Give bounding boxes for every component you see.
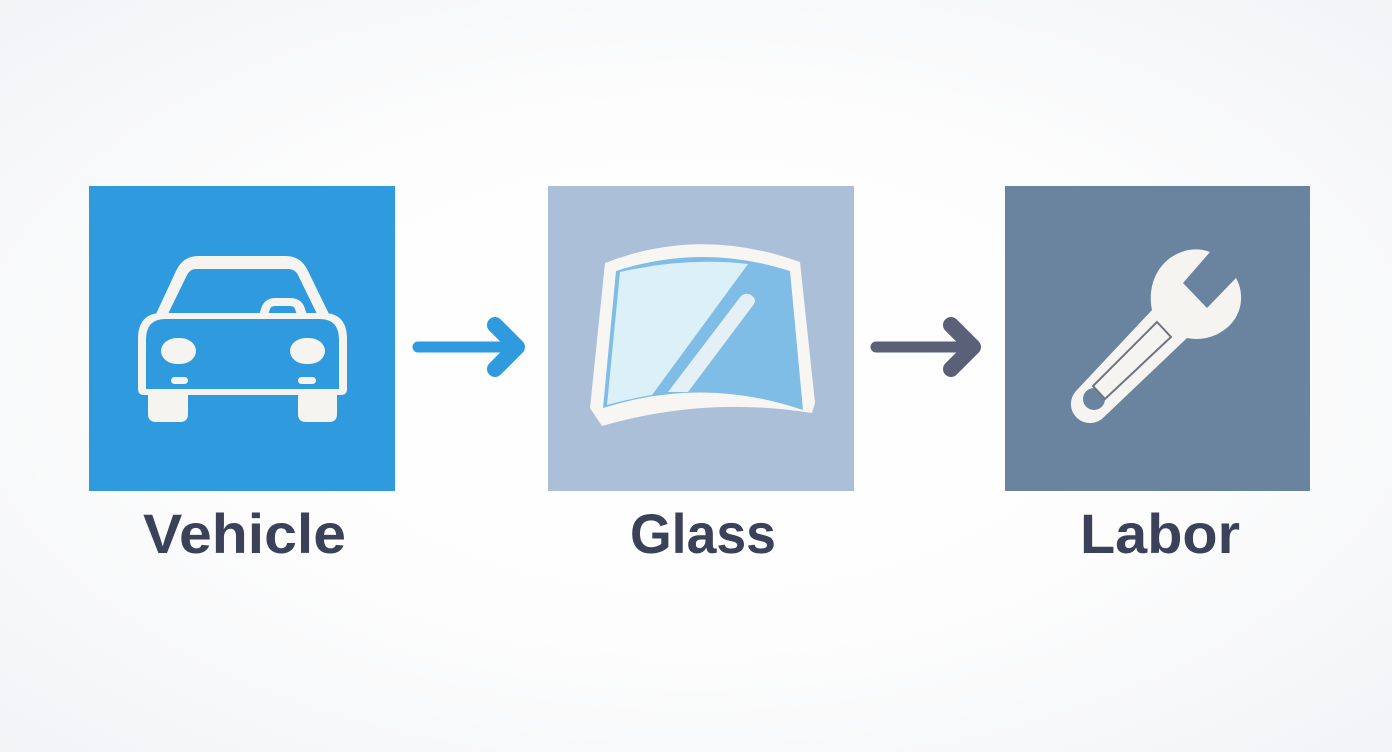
label: Glass: Glass <box>630 502 776 565</box>
icon: wrench <box>1071 249 1241 423</box>
icon: car front view <box>138 256 347 422</box>
glass tile <box>548 186 854 491</box>
vehicle tile <box>89 186 395 491</box>
icon: windshield <box>590 244 815 426</box>
label: Labor: Labor <box>1080 502 1240 565</box>
arrow: glass to labor <box>876 325 973 369</box>
arrow: vehicle to glass <box>418 325 517 369</box>
labor tile <box>1005 186 1310 491</box>
label: Vehicle: Vehicle <box>143 502 346 565</box>
panel: glass <box>548 186 854 565</box>
panel: labor <box>1005 186 1310 565</box>
panel: vehicle <box>89 186 395 565</box>
